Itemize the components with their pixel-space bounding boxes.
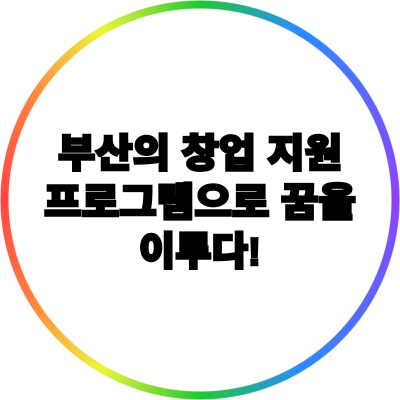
title line 1: 부산의 창업 지원 [58,133,342,176]
title line 3: 이루다! [139,231,261,274]
title line 2: 프로그램으로 꿈을 [44,182,356,225]
